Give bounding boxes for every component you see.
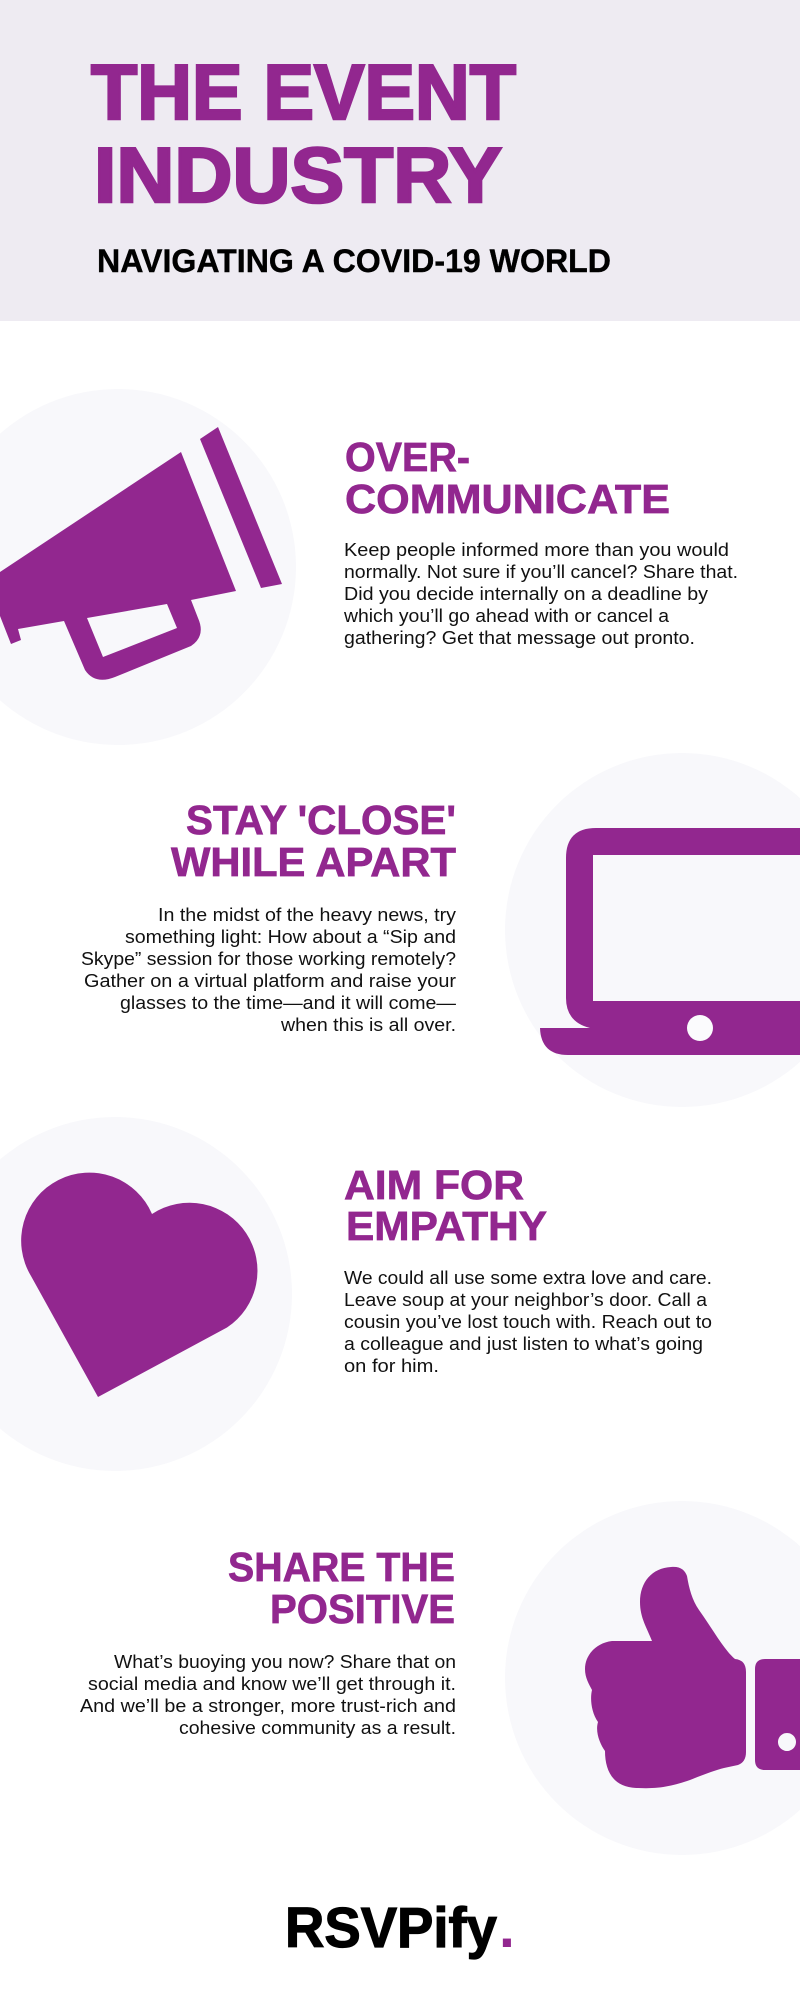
subtitle: NAVIGATING A COVID-19 WORLD: [97, 243, 611, 279]
heading: SHARE THE: [228, 1544, 455, 1590]
heading: OVER-: [345, 434, 470, 480]
body text: Did you decide internally on a deadline by: [344, 584, 708, 604]
title: THE EVENT: [91, 48, 516, 136]
body text: We could all use some extra love and care.: [344, 1268, 712, 1288]
body text: Keep people informed more than you would: [344, 540, 729, 560]
body text: Gather on a virtual platform and raise your: [84, 971, 456, 991]
body text: Leave soup at your neighbor’s door. Call a: [344, 1290, 708, 1310]
heading: [228, 1544, 455, 1632]
body text: glasses to the time—and it will come—: [120, 993, 456, 1013]
heading: WHILE APART: [171, 839, 456, 885]
heading: AIM FOR: [344, 1162, 524, 1208]
panel: over-communicate: [0, 389, 738, 745]
body text: which you’ll go ahead with or cancel a: [343, 606, 670, 626]
body text: [80, 1652, 456, 1738]
body text: [343, 540, 738, 648]
body text: when this is all over.: [280, 1015, 456, 1035]
icon: laptop: [540, 828, 800, 1055]
body text: social media and know we’ll get through it.: [88, 1674, 456, 1694]
panel: share the positive: [80, 1501, 800, 1855]
heading: COMMUNICATE: [345, 476, 670, 522]
heading: [171, 797, 456, 885]
heading: EMPATHY: [346, 1203, 547, 1249]
heading: [345, 434, 670, 522]
heading: [344, 1162, 547, 1249]
panel: stay close while apart: [81, 753, 800, 1107]
heading: STAY 'CLOSE': [186, 797, 456, 843]
title: [91, 48, 516, 219]
body text: What’s buoying you now? Share that on: [114, 1652, 456, 1672]
body text: [81, 905, 456, 1035]
body text: And we’ll be a stronger, more trust-rich and: [80, 1696, 456, 1716]
logo: RSVPify: .: [499, 1896, 515, 1960]
body text: a colleague and just listen to what’s going: [344, 1334, 703, 1354]
body text: on for him.: [344, 1356, 439, 1376]
body text: [344, 1268, 712, 1376]
icon: heart: [21, 1173, 257, 1397]
panel: aim for empathy: [0, 1117, 712, 1471]
body text: gathering? Get that message out pronto.: [344, 628, 695, 648]
logo: RSVPify: RSVPify: [285, 1896, 497, 1960]
body text: cousin you’ve lost touch with. Reach out to: [344, 1312, 712, 1332]
body text: cohesive community as a result.: [179, 1718, 456, 1738]
heading: POSITIVE: [270, 1586, 455, 1632]
body text: In the midst of the heavy news, try: [158, 905, 456, 925]
panel: header: [0, 0, 800, 321]
icon: megaphone: [0, 427, 282, 680]
body text: Skype” session for those working remotely?: [81, 949, 456, 969]
body text: something light: How about a “Sip and: [125, 927, 456, 947]
icon: thumbs up: [585, 1567, 800, 1788]
body text: normally. Not sure if you’ll cancel? Share that.: [344, 562, 738, 582]
title: INDUSTRY: [94, 131, 502, 219]
